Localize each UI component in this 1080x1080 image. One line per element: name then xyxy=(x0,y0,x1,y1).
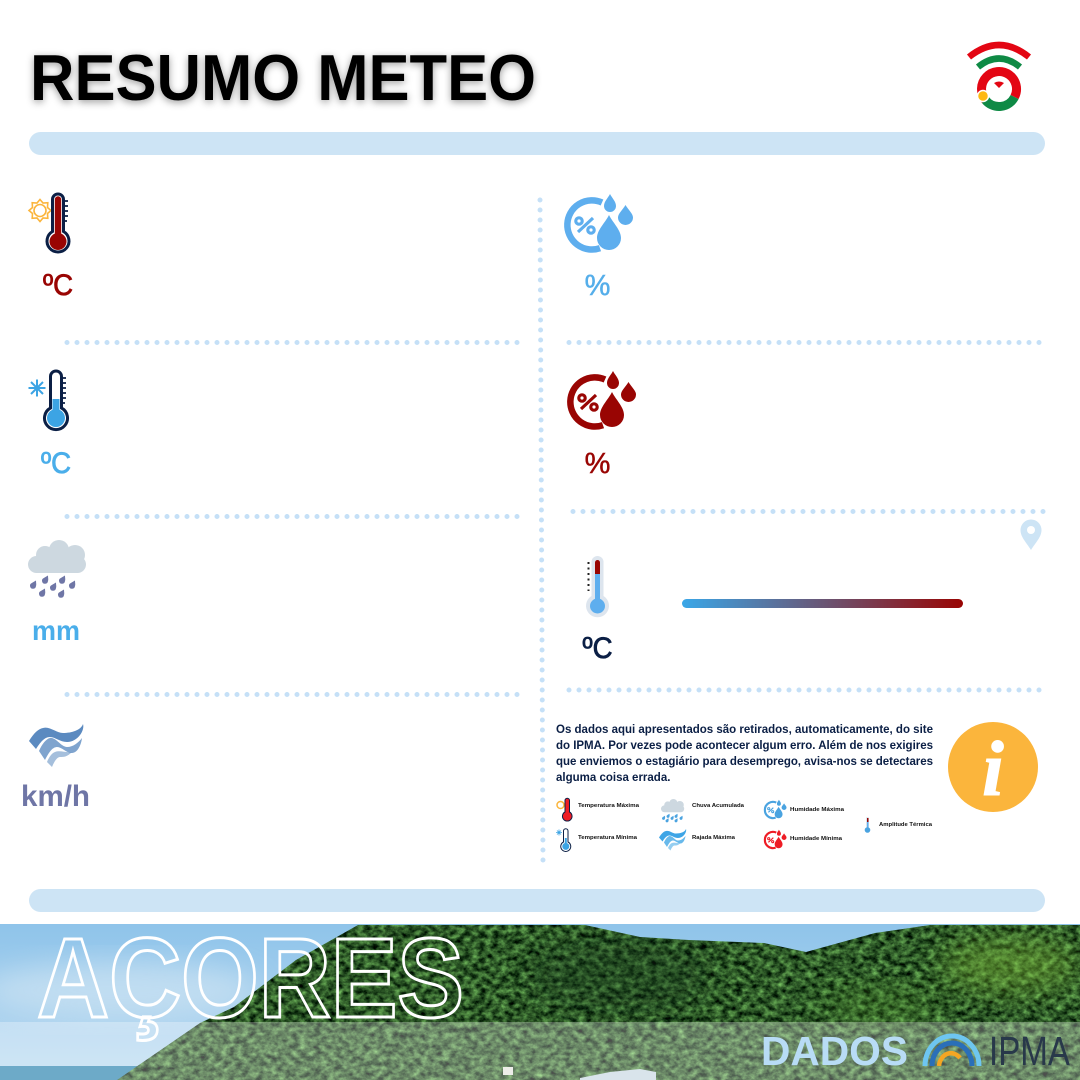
icon: wind xyxy=(29,724,83,767)
bottom band xyxy=(29,889,1045,912)
panel: humidade máxima xyxy=(567,194,633,302)
info text: do IPMA. Por vezes pode acontecer algum erro. Além de nos exigires xyxy=(556,740,933,752)
icon: info circle: i xyxy=(982,725,1004,812)
icon: humidity blue xyxy=(567,194,633,250)
icon: IPMA arcs xyxy=(925,1036,979,1066)
legend label: humidade mínima: Humidade Mínima xyxy=(790,836,843,842)
unit: % xyxy=(585,270,610,302)
unit: ºC xyxy=(582,632,612,665)
legend xyxy=(556,798,933,851)
photo banner xyxy=(0,924,1080,1080)
icon: sun thermometer xyxy=(29,194,69,252)
legend: amplitude térmica: Amplitude Térmica xyxy=(879,822,933,828)
unit: ºC xyxy=(43,269,73,302)
icon: humidity red xyxy=(570,371,636,427)
legend: rajada máxima: Rajada Máxima xyxy=(692,835,736,841)
panel: chuva acumulada xyxy=(28,540,86,646)
legend: temperatura máxima: Temperatura Máxima xyxy=(578,803,640,809)
source label xyxy=(761,1028,1071,1074)
info text: alguma coisa errada. xyxy=(556,772,670,784)
unit: km/h xyxy=(21,780,90,813)
panel: temperatura máxima xyxy=(29,194,73,302)
top band xyxy=(29,132,1045,155)
unit: mm xyxy=(32,615,80,646)
legend: rajada máxima xyxy=(659,829,736,850)
region name: AÇORES xyxy=(37,915,464,1041)
icon: logo xyxy=(969,45,1029,107)
panel: temperatura mínima xyxy=(28,371,71,480)
legend: temperatura mínima xyxy=(556,829,638,851)
info text xyxy=(556,724,933,784)
title: RESUMO METEO xyxy=(30,41,536,114)
legend: temperatura máxima xyxy=(557,798,640,821)
panel: humidade mínima xyxy=(570,371,636,480)
legend label: humidade máxima: Humidade Máxima xyxy=(790,807,845,813)
legend: chuva acumulada xyxy=(661,799,745,822)
info text: Os dados aqui apresentados são retirados, automaticamente, do site xyxy=(556,724,933,736)
legend: humidade mínima xyxy=(765,830,787,848)
legend: temperatura mínima: Temperatura Mínima xyxy=(578,835,638,841)
unit: ºC xyxy=(41,447,71,480)
panel: rajada máxima xyxy=(21,724,90,813)
info text: que enviemos o estagiário para desemprego, avisa-nos se detectares xyxy=(556,756,933,768)
icon: info circle xyxy=(948,722,1038,812)
legend: chuva acumulada: Chuva Acumulada xyxy=(692,803,745,809)
source label: DADOS xyxy=(761,1028,908,1074)
icon: snow thermometer xyxy=(28,371,68,430)
gradient bar xyxy=(682,599,963,608)
legend: amplitude térmica xyxy=(865,817,933,833)
legend: humidade máxima xyxy=(765,800,787,818)
icon: rain cloud xyxy=(28,540,86,598)
icon: location pin xyxy=(1020,520,1042,550)
unit: % xyxy=(585,448,610,480)
panel: amplitude térmica xyxy=(582,556,963,665)
icon: amplitude thermometer xyxy=(586,556,609,617)
